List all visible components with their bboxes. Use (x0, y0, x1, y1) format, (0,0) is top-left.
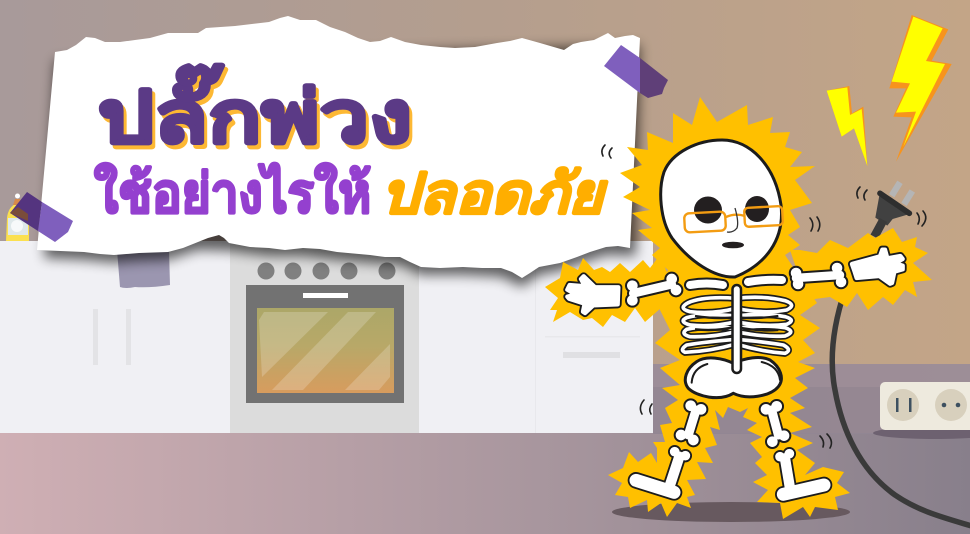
socket shadow (873, 427, 970, 439)
title: main heading: ปลั๊กพ่วง (101, 68, 415, 162)
oven knobs (258, 262, 396, 280)
torn paper shadow (44, 45, 640, 287)
spine (732, 285, 741, 373)
right shin and foot (780, 454, 824, 494)
nose (727, 208, 738, 232)
hanging cloth (117, 250, 170, 288)
electric burst: left arm (545, 255, 670, 327)
mouth (722, 242, 744, 248)
small bolt (827, 86, 867, 166)
left thigh bone (681, 406, 701, 440)
shake marks (602, 145, 926, 448)
power cord (832, 290, 970, 527)
oven (230, 241, 419, 433)
plug body (875, 196, 908, 226)
collarbones (690, 280, 782, 285)
big bolt (889, 15, 952, 162)
plug prongs (892, 182, 912, 204)
oven door (246, 285, 404, 403)
left arm bone (632, 279, 676, 300)
pelvis (685, 358, 781, 398)
left hand (567, 276, 618, 313)
title: main heading (98, 64, 415, 162)
left shin and foot (636, 452, 685, 492)
plug (874, 182, 912, 237)
oven window (257, 308, 394, 393)
figure shadow (612, 502, 850, 522)
right thigh bone (766, 406, 784, 442)
kitchen cabinets (0, 241, 653, 433)
wall socket (880, 382, 970, 430)
head (661, 140, 782, 277)
electric burst: right arm (790, 228, 932, 310)
eyes (694, 196, 769, 224)
floor (0, 364, 970, 534)
rib cage (683, 297, 792, 353)
right hand (852, 250, 903, 284)
bottle (6, 194, 29, 241)
title: main heading: ปลั๊กพ่วง (98, 64, 412, 158)
electric burst: head and body (608, 97, 850, 519)
lightning bolts (827, 15, 952, 166)
tape left (10, 192, 73, 242)
subtitle: safely highlighted: ปลอดภัย (381, 162, 607, 225)
tape top right (604, 45, 668, 98)
oven handle (303, 293, 348, 298)
glasses (684, 206, 783, 233)
torn paper panel (37, 16, 640, 278)
skeleton (567, 140, 903, 494)
right arm bone (796, 268, 841, 284)
subtitle: how to use: ใช้อย่างไรให้ (94, 162, 371, 224)
